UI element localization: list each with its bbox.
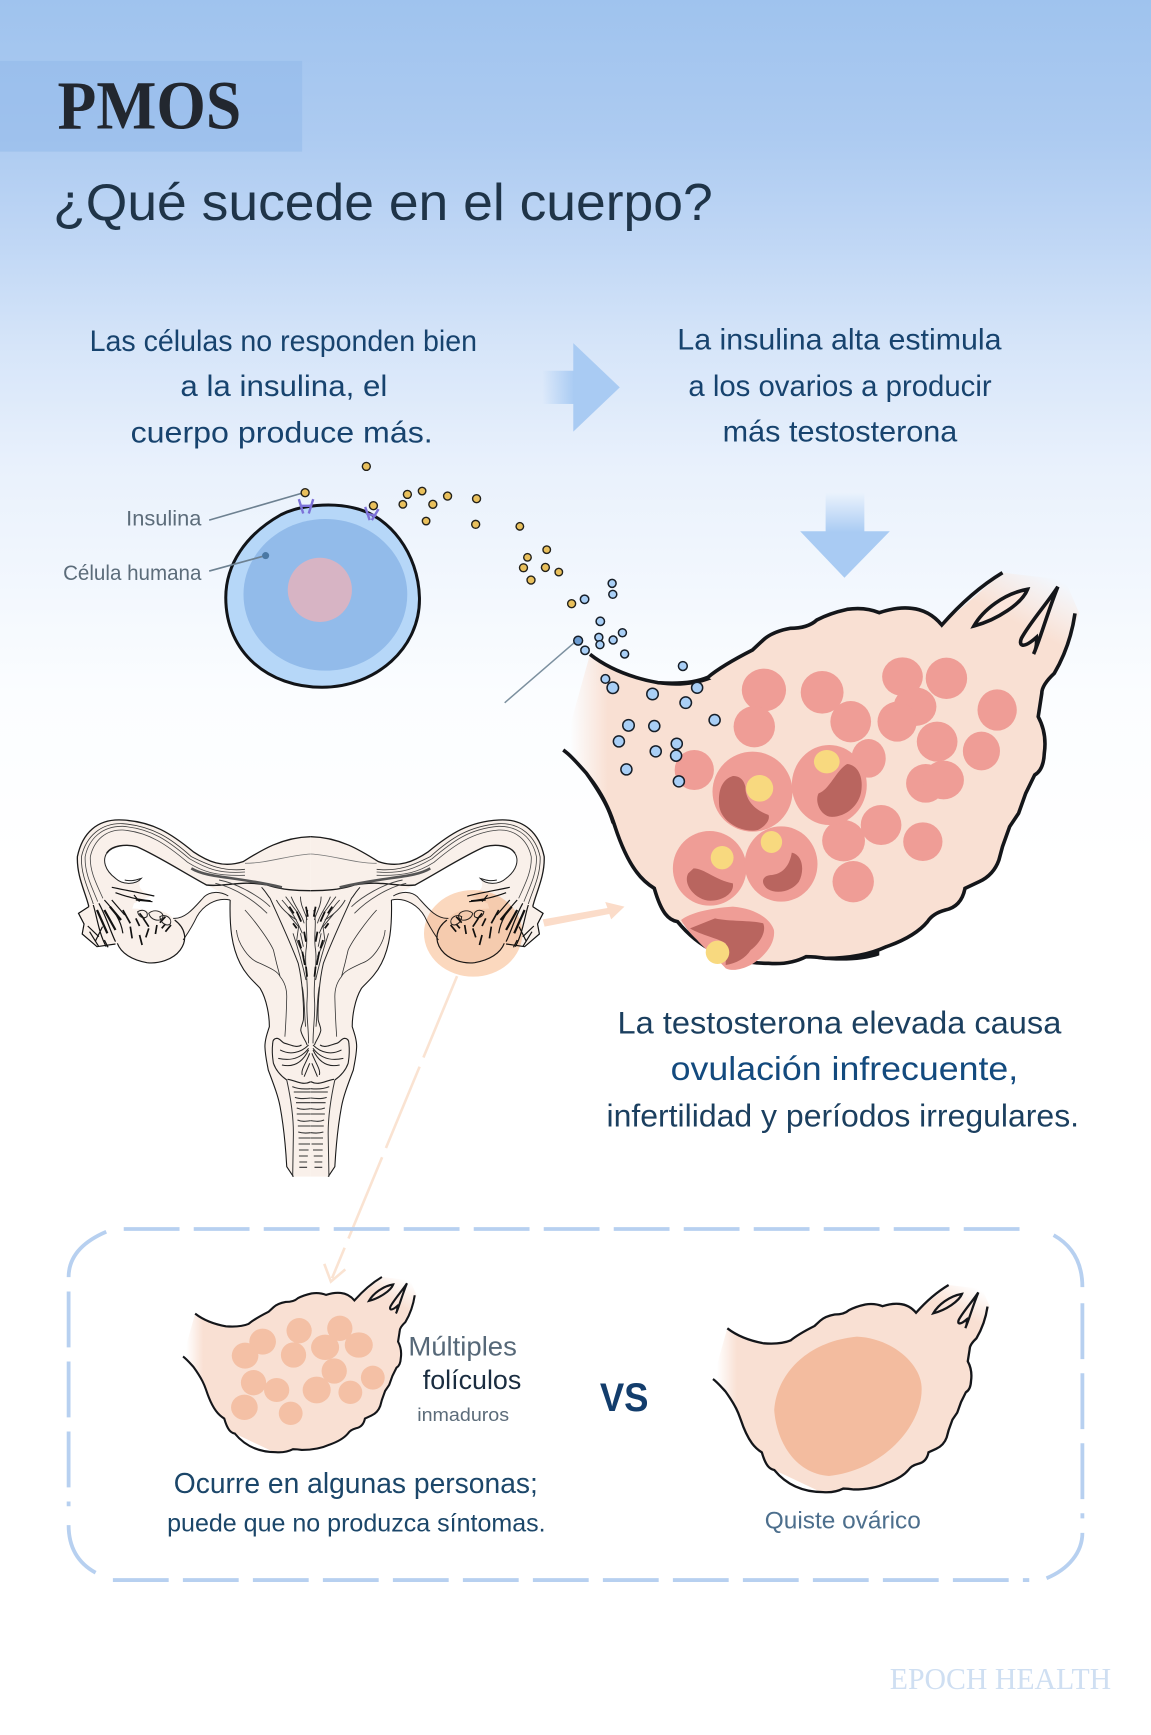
text block: ovary stimulation: La insulina alta estimula [677,324,1002,357]
ovulating follicle [681,907,774,970]
text block: occurs in some people [167,1468,546,1538]
highlight circle on ovary [424,890,522,977]
ovary: multiple follicles [183,1277,417,1452]
text block: testosterone effects: infertilidad y períodos irregulares. [606,1098,1079,1134]
subtitle: ¿Qué sucede en el cuerpo? [53,174,713,232]
brand: Epoch Health: EPOCH HEALTH [890,1661,1111,1696]
text block: testosterone effects: La testosterona elevada causa [618,1005,1062,1041]
text block: testosterone effects: ovulación infrecuente, [671,1051,1018,1088]
label: célula humana: Célula humana [63,560,201,585]
ovary: ovarian cyst [713,1285,990,1492]
text block: testosterone effects [606,1005,1079,1134]
text block: ovary stimulation [677,324,1002,449]
insulin particles [301,462,576,608]
text block: ovary stimulation: a los ovarios a producir [688,370,992,403]
label: múltiples folículos inmaduros: folículos [423,1365,521,1395]
insulin receptors [299,499,379,520]
text block: insulin response: a la insulina, el [180,370,387,403]
cyst [774,1337,922,1476]
cell body [226,505,419,687]
text block: ovary stimulation: más testosterona [723,416,958,449]
label: múltiples folículos inmaduros [408,1332,521,1425]
mature follicle 1 [712,752,792,832]
label: célula humana [63,552,269,585]
small follicles [675,657,1017,902]
mature follicle 4 [745,826,817,902]
dashed comparison panel [69,1229,1082,1580]
text block: insulin response [90,325,477,450]
text block: occurs in some people: Ocurre en algunas personas; [174,1468,538,1500]
label: insulina [126,492,304,531]
arrow: peach to ovary [543,902,624,927]
text block: insulin response: cuerpo produce más. [131,417,433,450]
arrow: down [800,492,890,578]
title panel [0,61,302,152]
uterus illustration [77,820,624,1177]
label: insulina: Insulina [126,506,201,531]
cell diagram [63,492,419,687]
ink accents on ovary outline [563,677,879,961]
label: quiste ovárico: Quiste ovárico [765,1507,921,1534]
text block: insulin response: Las células no responden bien [90,325,477,358]
label: múltiples folículos inmaduros: Múltiples [408,1332,517,1362]
immature follicles [231,1316,385,1425]
ovary: large illustration [563,573,1079,970]
label: múltiples folículos inmaduros: inmaduros [417,1404,509,1425]
dashed peach connector [324,976,457,1282]
cell cytoplasm [243,519,407,671]
arrow: right [542,343,620,432]
VS label: VS [600,1376,649,1420]
mature follicle 3 [673,831,746,906]
title: PMOS [58,67,241,143]
mature follicle 2 [792,745,867,825]
testosterone particles [574,579,720,787]
cell nucleus [288,558,352,622]
leader line to testosterone [505,640,578,703]
text block: occurs in some people: puede que no produzca síntomas. [167,1510,546,1538]
